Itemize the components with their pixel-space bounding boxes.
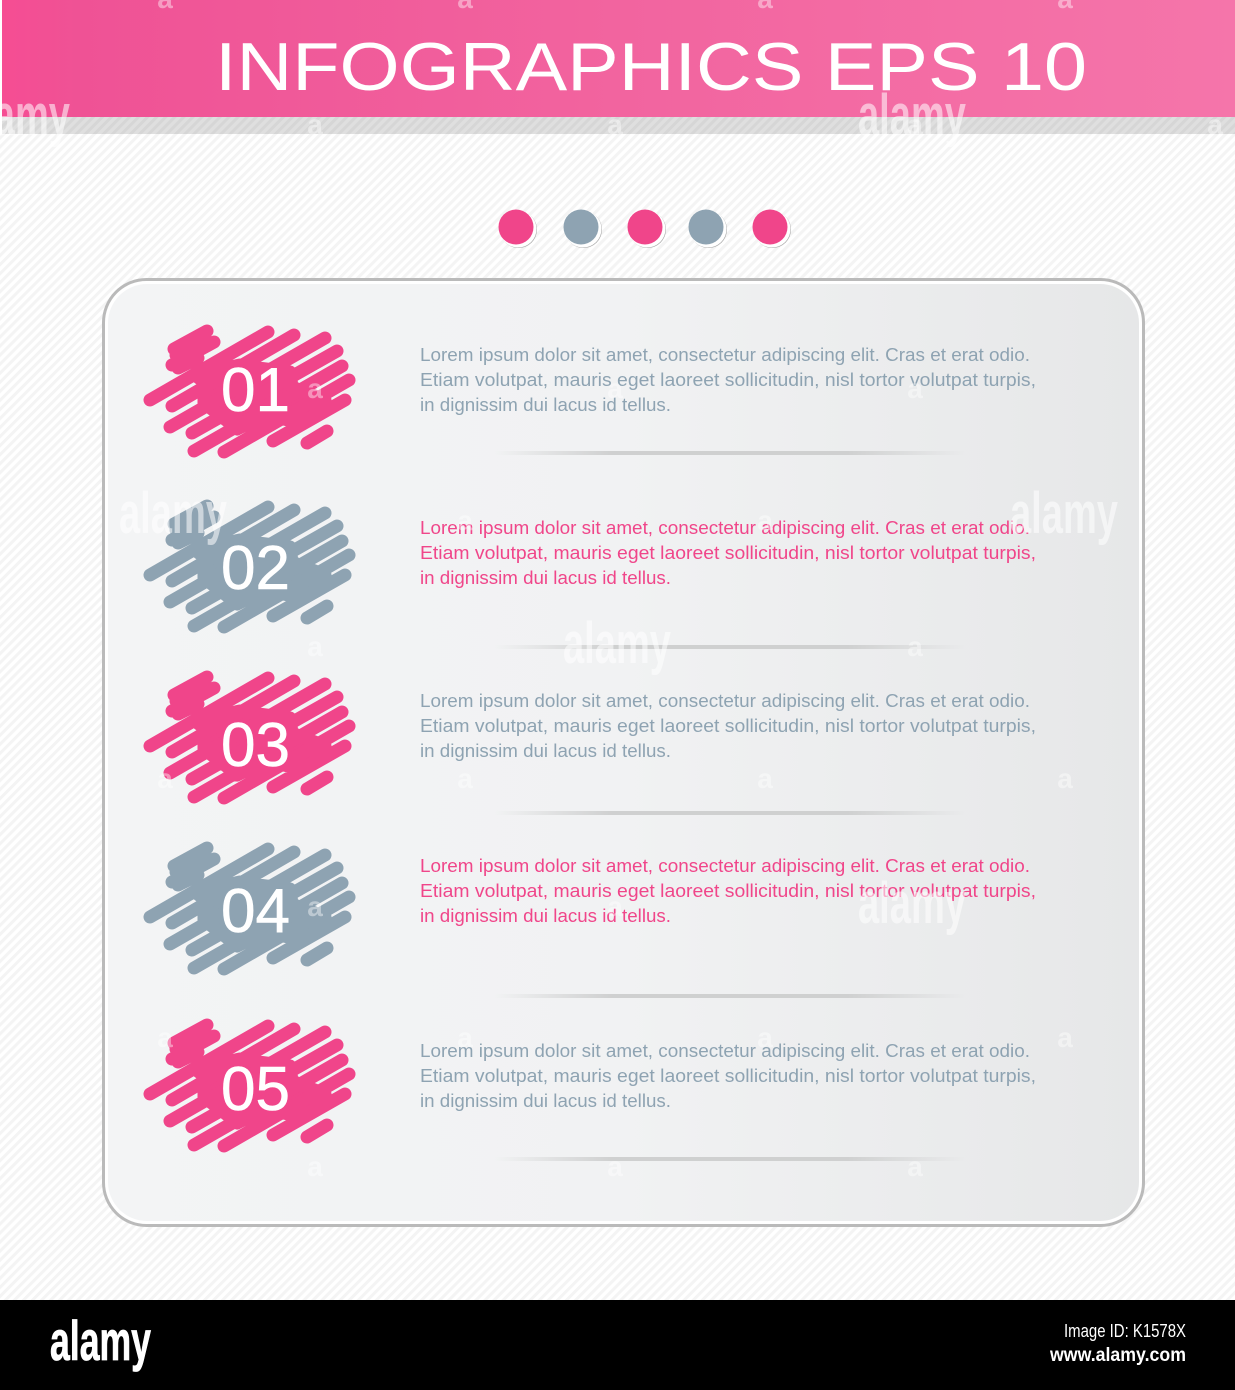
footer logo: alamy	[50, 1309, 151, 1372]
stock watermarks: a	[307, 109, 323, 140]
item 03	[150, 677, 1036, 798]
stock watermarks: a	[1207, 109, 1223, 140]
text block 05: Etiam volutpat, mauris eget laoreet sollicitudin, nisl tortor volutpat turpis,	[420, 1066, 1036, 1086]
footer bar	[0, 1300, 1235, 1390]
pagination dots	[498, 210, 791, 248]
number 05: 05	[221, 1055, 290, 1124]
text block 02: Etiam volutpat, mauris eget laoreet sollicitudin, nisl tortor volutpat turpis,	[420, 543, 1036, 563]
stock watermarks: a	[307, 373, 323, 404]
stock watermarks: a	[607, 1151, 623, 1182]
stock watermarks: alamy	[858, 871, 966, 936]
stock watermarks: a	[607, 109, 623, 140]
item 01	[150, 331, 1036, 452]
text block 01: Lorem ipsum dolor sit amet, consectetur adipiscing elit. Cras et erat odio.	[420, 345, 1030, 365]
number 01: 01	[221, 356, 290, 425]
stock watermarks: a	[457, 1022, 473, 1053]
item 05	[150, 1025, 1036, 1146]
stock watermarks: a	[907, 1151, 923, 1182]
stock watermarks: a	[307, 631, 323, 662]
number 04: 04	[221, 877, 290, 946]
stock watermarks: a	[607, 373, 623, 404]
text block 01: in dignissim dui lacus id tellus.	[420, 395, 671, 415]
stock watermarks: a	[757, 1022, 773, 1053]
scribble badge 03	[150, 677, 349, 798]
text block 04: in dignissim dui lacus id tellus.	[420, 906, 671, 926]
text block 05: Lorem ipsum dolor sit amet, consectetur adipiscing elit. Cras et erat odio.	[420, 1041, 1030, 1061]
text block 03: Lorem ipsum dolor sit amet, consectetur adipiscing elit. Cras et erat odio.	[420, 691, 1030, 711]
text block 03: in dignissim dui lacus id tellus.	[420, 741, 671, 761]
stock watermarks: a	[757, 505, 773, 536]
stock watermarks: a	[307, 891, 323, 922]
stock watermarks: a	[457, 763, 473, 794]
website: www.alamy.com	[1049, 1345, 1186, 1366]
scribble badge 05	[150, 1025, 349, 1146]
header banner	[2, 0, 1235, 134]
text block 02: in dignissim dui lacus id tellus.	[420, 568, 671, 588]
text block 04: Etiam volutpat, mauris eget laoreet sollicitudin, nisl tortor volutpat turpis,	[420, 881, 1036, 901]
stock watermarks: a	[907, 109, 923, 140]
number 03: 03	[221, 711, 290, 780]
stock watermarks: a	[1057, 763, 1073, 794]
divider lines	[495, 451, 965, 1161]
stock watermarks: a	[307, 1151, 323, 1182]
scribble badge 04	[150, 848, 349, 969]
scribble badge 01	[150, 331, 349, 452]
stock watermarks: alamy	[119, 481, 227, 546]
number 02: 02	[221, 534, 290, 603]
image id: Image ID: K1578X	[1064, 1321, 1186, 1341]
stock watermarks: a	[157, 763, 173, 794]
stock watermarks: alamy	[1010, 481, 1118, 546]
stock watermarks: a	[1057, 1022, 1073, 1053]
stock watermarks: a	[157, 1022, 173, 1053]
stock watermarks: a	[457, 505, 473, 536]
stock watermarks: a	[757, 763, 773, 794]
text block 04: Lorem ipsum dolor sit amet, consectetur adipiscing elit. Cras et erat odio.	[420, 856, 1030, 876]
stock watermarks: a	[607, 891, 623, 922]
text block 01: Etiam volutpat, mauris eget laoreet sollicitudin, nisl tortor volutpat turpis,	[420, 370, 1036, 390]
stock watermarks: alamy	[563, 611, 671, 676]
text block 05: in dignissim dui lacus id tellus.	[420, 1091, 671, 1111]
item 04	[150, 848, 1036, 969]
stock watermarks: a	[907, 373, 923, 404]
scribble badge 02	[150, 506, 349, 627]
stock watermarks: alamy	[858, 83, 966, 148]
main panel	[104, 280, 1144, 1226]
stock watermarks: a	[907, 631, 923, 662]
text block 02: Lorem ipsum dolor sit amet, consectetur adipiscing elit. Cras et erat odio.	[420, 518, 1030, 538]
text block 03: Etiam volutpat, mauris eget laoreet sollicitudin, nisl tortor volutpat turpis,	[420, 716, 1036, 736]
title: INFOGRAPHICS EPS 10	[215, 29, 1087, 105]
item 02	[150, 506, 1036, 627]
